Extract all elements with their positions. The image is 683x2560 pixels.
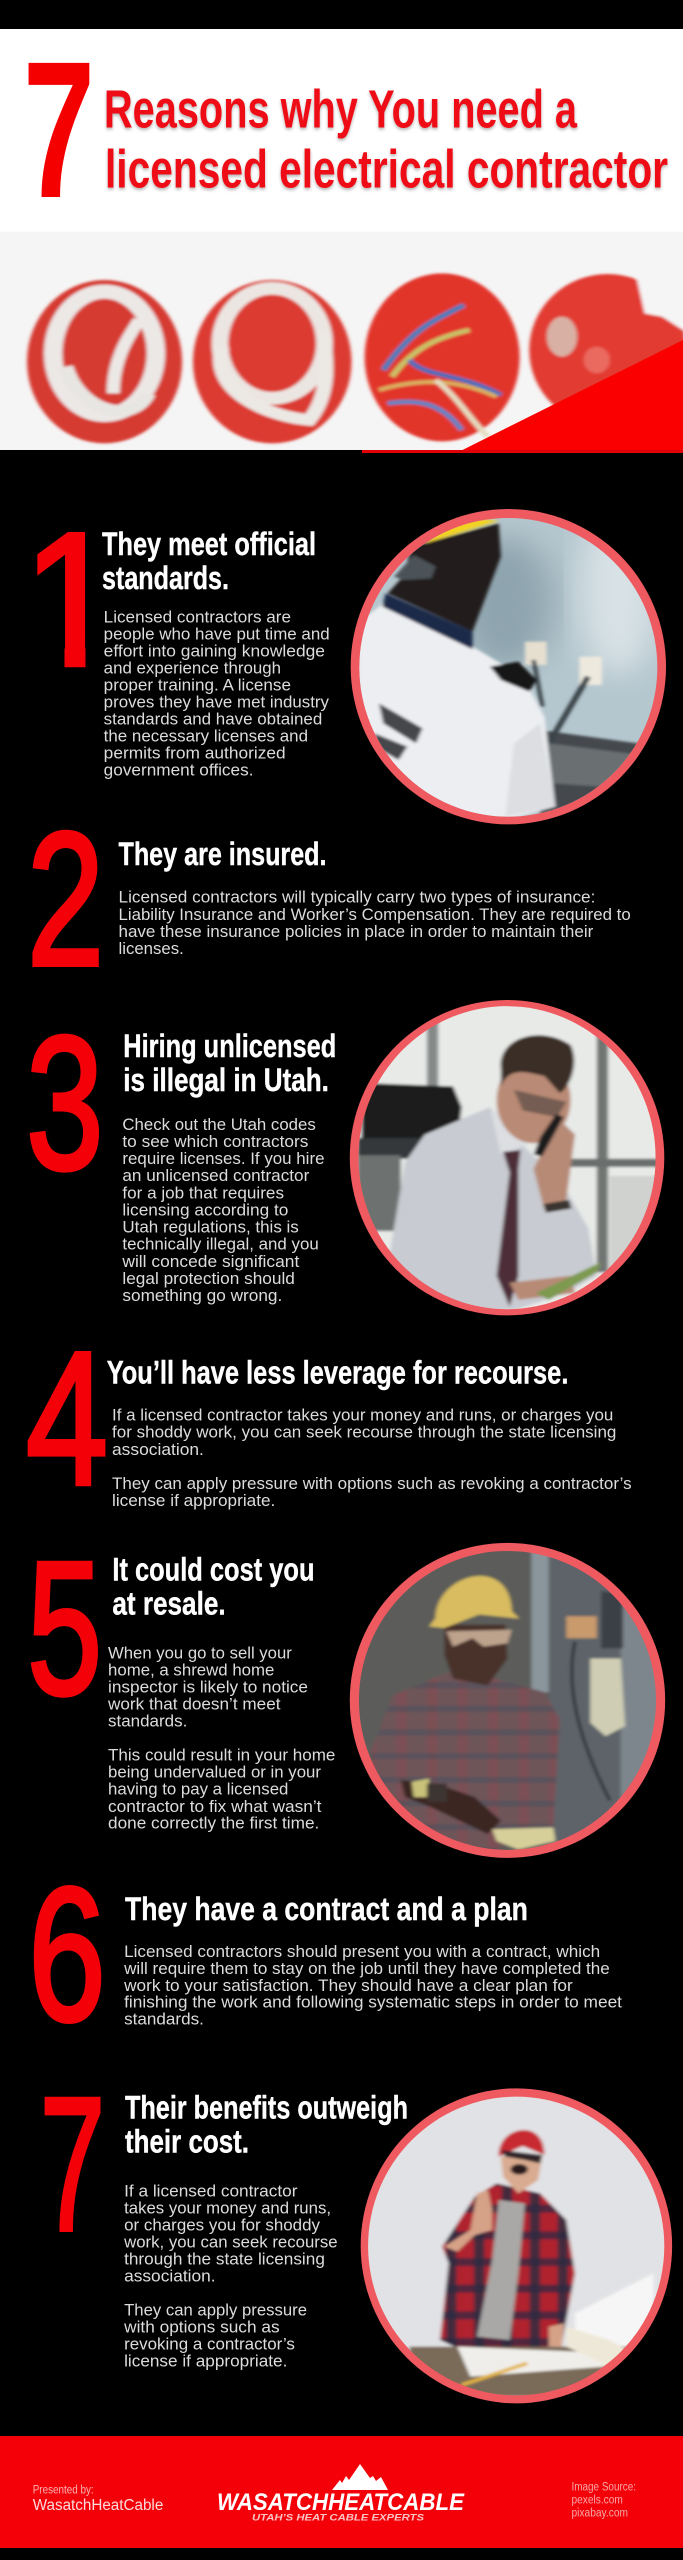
body text: to see which contractors	[122, 1133, 308, 1151]
body text: being undervalued or in your	[108, 1764, 322, 1782]
body text: Check out the Utah codes	[122, 1116, 316, 1134]
heading	[123, 1028, 336, 1098]
photo: contractor giving thumbs up	[357, 2088, 683, 2407]
red corner triangle	[462, 340, 683, 450]
body text: will concede significant	[121, 1253, 300, 1271]
body text: This could result in your home	[108, 1747, 335, 1765]
body text: Licensed contractors should present you with a contract, which	[124, 1943, 600, 1961]
body text: licenses.	[118, 940, 184, 958]
body text: license if appropriate.	[124, 2353, 287, 2371]
logo: Wasatch Heat Cable: UTAH’S HEAT CABLE EXPERTS	[252, 2512, 425, 2524]
image sources	[572, 2482, 636, 2520]
big number 7: 7	[23, 21, 95, 239]
heading	[102, 526, 316, 596]
box 3	[365, 273, 520, 441]
body text: revoking a contractor’s	[124, 2336, 295, 2354]
body text: work to your satisfaction. They should have a clear plan for	[123, 1977, 573, 1995]
heading	[125, 2089, 408, 2159]
body text: proper training. A license	[104, 676, 291, 694]
number 4: 4	[26, 1313, 108, 1525]
body text: something go wrong.	[122, 1287, 282, 1305]
heading: standards.	[102, 560, 229, 596]
body text: association.	[112, 1441, 204, 1459]
body text: with options such as	[123, 2319, 280, 2337]
red strip under photo	[362, 450, 683, 453]
body text: have these insurance policies in place in order to maintain their	[118, 923, 594, 941]
heading: You’ll have less leverage for recourse.	[107, 1354, 568, 1390]
body text: permits from authorized	[104, 745, 286, 763]
body text: They can apply pressure with options such as revoking a contractor’s	[112, 1475, 632, 1493]
body text: Licensed contractors will typically carry two types of insurance:	[118, 889, 595, 907]
box 4	[529, 274, 683, 426]
body text: Liability Insurance and Worker’s Compensation. They are required to	[118, 906, 631, 924]
body text: If a licensed contractor takes your money and runs, or charges you	[112, 1406, 613, 1424]
body text	[121, 1116, 325, 1305]
body text: government offices.	[104, 762, 254, 780]
panel: reason 3	[26, 998, 675, 1317]
body text: work, you can seek recourse	[123, 2234, 338, 2252]
body text: and experience through	[104, 659, 281, 677]
heading: They are insured.	[118, 836, 326, 872]
body text: require licenses. If you hire	[122, 1150, 325, 1168]
photo: worker in yellow hard hat	[348, 1540, 675, 1861]
body text	[107, 1644, 335, 1832]
body text: having to pay a licensed	[108, 1781, 288, 1799]
heading: at resale.	[112, 1586, 226, 1622]
panel: reason 5	[27, 1523, 675, 1861]
box 1	[27, 280, 182, 443]
body text: Utah regulations, this is	[122, 1218, 299, 1236]
number 7: 7	[40, 2059, 105, 2271]
image sources: pexels.com	[572, 2494, 623, 2506]
body text: people who have put time and	[104, 625, 330, 643]
body text: When you go to sell your	[108, 1644, 292, 1662]
presented by: Presented by:	[33, 2484, 94, 2496]
body text: an unlicensed contractor	[122, 1167, 310, 1185]
body text	[118, 889, 631, 958]
body text: standards.	[108, 1712, 187, 1730]
image sources: Image Source:	[572, 2482, 636, 2494]
body text: through the state licensing	[124, 2251, 325, 2269]
body text: association.	[124, 2268, 216, 2286]
panel: electrical boxes photo	[0, 232, 683, 450]
body text: work that doesn’t meet	[107, 1696, 281, 1714]
body text: or charges you for shoddy	[124, 2217, 321, 2235]
panel: footer	[0, 2436, 683, 2548]
body text: effort into gaining knowledge	[104, 642, 325, 660]
body text: Licensed contractors are	[104, 608, 291, 626]
body text: license if appropriate.	[112, 1492, 275, 1510]
body text: for a job that requires	[122, 1184, 284, 1202]
panel: reason 7	[44, 2088, 672, 2404]
title	[104, 80, 668, 200]
body text: standards and have obtained	[104, 711, 322, 729]
body text	[112, 1406, 632, 1510]
heading: Their benefits outweigh	[125, 2089, 408, 2125]
number 5: 5	[27, 1523, 102, 1735]
body text: contractor to fix what wasn’t	[108, 1798, 322, 1816]
body text: If a licensed contractor	[124, 2183, 298, 2201]
heading	[112, 1552, 315, 1622]
body text: the necessary licenses and	[104, 728, 308, 746]
body text: technically illegal, and you	[122, 1236, 319, 1254]
number 3: 3	[26, 998, 104, 1210]
body text: finishing the work and following systematic steps in order to meet	[124, 1994, 622, 2012]
body text: done correctly the first time.	[108, 1814, 319, 1832]
heading: It could cost you	[112, 1552, 315, 1588]
heading: They meet official	[102, 526, 316, 562]
panel: reason 4	[26, 1313, 632, 1525]
photo: businessman on phone	[348, 1000, 675, 1317]
presented by	[33, 2484, 163, 2514]
body text: takes your money and runs,	[124, 2200, 331, 2218]
number 2: 2	[27, 794, 104, 1006]
panel: reason 2	[27, 794, 631, 1006]
panel: header	[0, 21, 683, 239]
body text: for shoddy work, you can seek recourse through the state licensing	[112, 1424, 616, 1442]
panel: reason 6	[28, 1849, 622, 2061]
body text: home, a shrewd home	[108, 1662, 274, 1680]
body text: legal protection should	[122, 1270, 295, 1288]
body text: licensing according to	[122, 1201, 288, 1219]
body text	[104, 608, 330, 780]
number 6: 6	[28, 1849, 106, 2061]
image sources: pixabay.com	[572, 2508, 628, 2520]
body text	[123, 1943, 622, 2029]
presented by: WasatchHeatCable	[33, 2497, 163, 2514]
icon: mountains	[332, 2464, 388, 2490]
body text: proves they have met industry	[104, 694, 330, 712]
heading: is illegal in Utah.	[123, 1062, 329, 1098]
heading: They have a contract and a plan	[125, 1891, 528, 1927]
body text	[123, 2183, 338, 2371]
logo: Wasatch Heat Cable	[217, 2464, 465, 2524]
body text: inspector is likely to notice	[108, 1679, 308, 1697]
photo: electrician from behind	[348, 503, 675, 827]
box 2	[193, 280, 352, 443]
body text: standards.	[124, 2011, 204, 2029]
body text: will require them to stay on the job until they have completed the	[123, 1960, 610, 1978]
body text: They can apply pressure	[124, 2302, 307, 2320]
number 1: 1	[22, 494, 122, 706]
logo: Wasatch Heat Cable: WASATCHHEATCABLE	[217, 2489, 465, 2516]
heading: Hiring unlicensed	[123, 1028, 336, 1064]
heading: their cost.	[125, 2123, 249, 2159]
panel: reason 1	[22, 494, 675, 827]
